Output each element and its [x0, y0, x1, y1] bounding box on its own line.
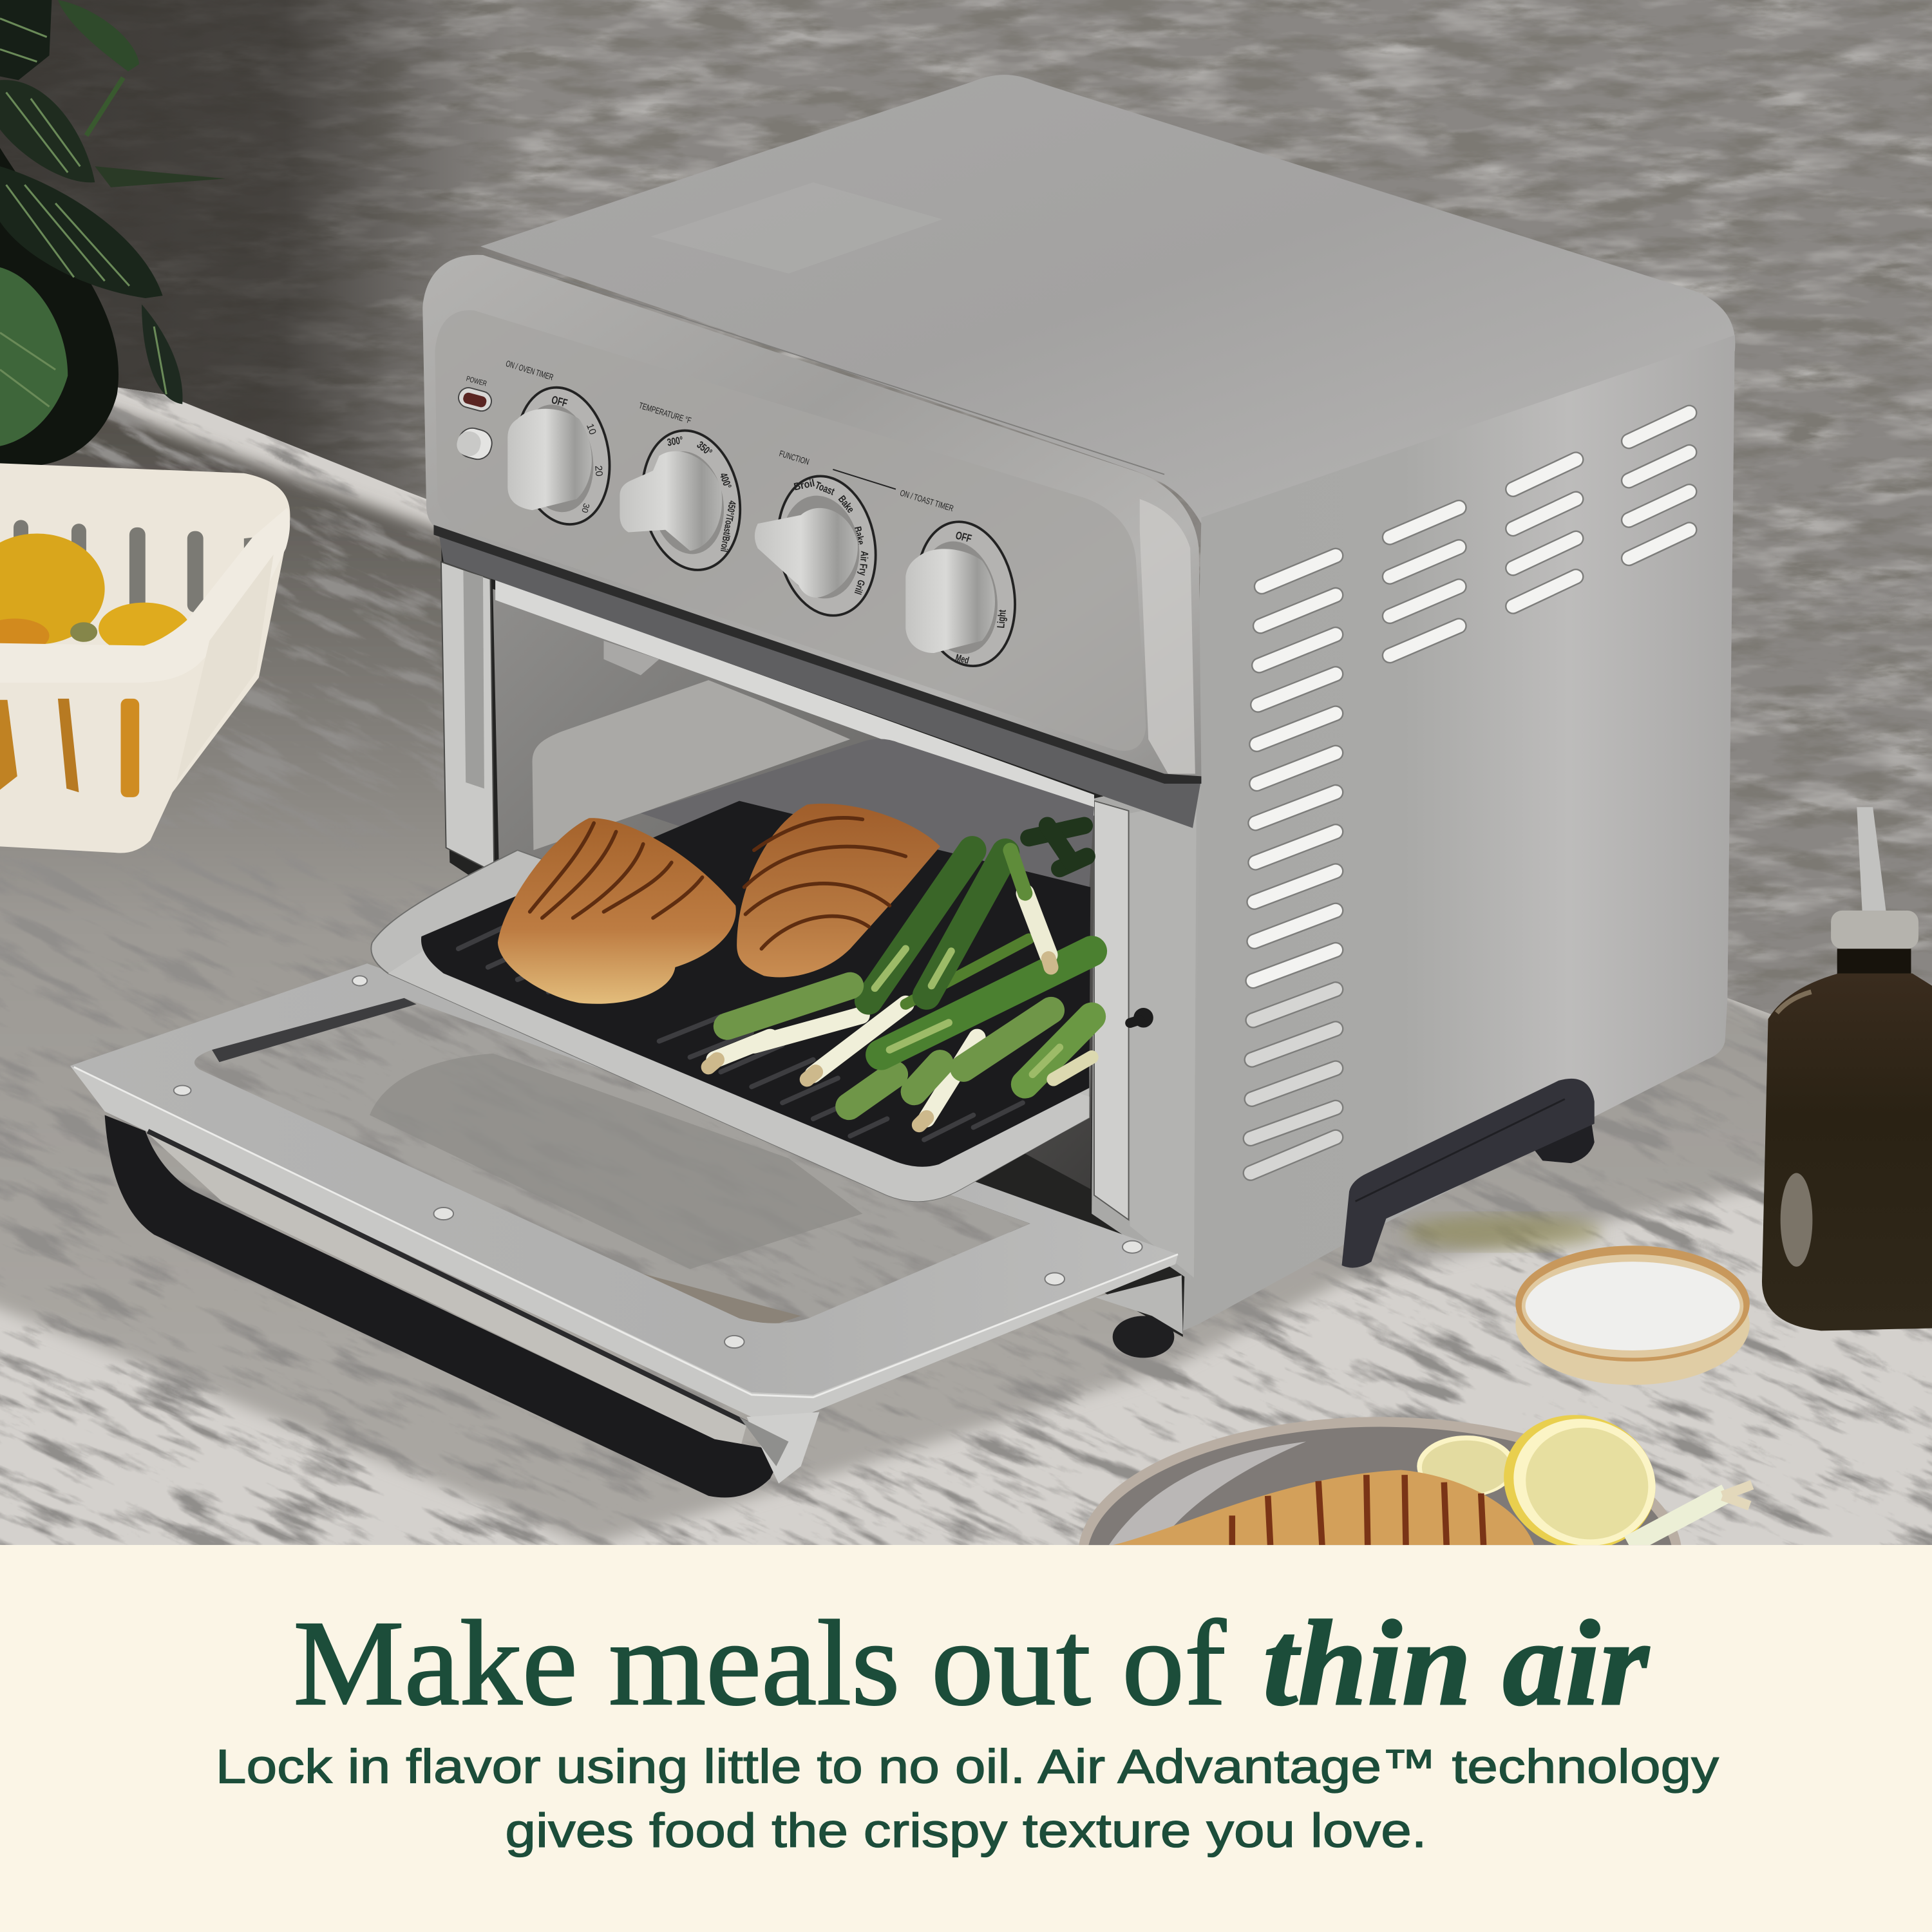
fruit basket: [0, 463, 290, 853]
headline emphasis: thin air: [1263, 1595, 1650, 1730]
countertop: [0, 357, 1932, 1553]
glass reflecting the counter: [185, 986, 1047, 1343]
knob: toast timer: Med: [954, 652, 970, 667]
oven top: [480, 75, 1735, 524]
door: [70, 963, 1183, 1497]
knob: function: Broil: [793, 477, 816, 493]
oven: [70, 75, 1735, 1497]
body line 1: Lock in flavor using little to no oil. Air Advantage™ technology: [216, 1739, 1719, 1793]
lemons: [0, 533, 105, 645]
asparagus and scallions: [708, 826, 1092, 1125]
door handle: [105, 1115, 784, 1497]
grill ribs: [459, 918, 1023, 1140]
grey seal strip: [439, 533, 1201, 828]
grill plate: [421, 801, 1090, 1167]
chicken left: [498, 818, 736, 1004]
power indicator: POWER: [465, 375, 488, 388]
door frame bands: [70, 963, 1178, 1417]
knob: temperature: 450°/Toast/Broil: [718, 500, 737, 553]
light button: [454, 425, 495, 462]
knob: oven timer: 10: [584, 422, 598, 436]
wall: [0, 0, 1932, 1084]
side vents: [1251, 413, 1689, 1173]
knob: function: Air Fry: [857, 551, 870, 576]
caption panel: [0, 1545, 1932, 1932]
front control panel: [422, 255, 1201, 779]
knob: toast timer: ON / TOAST TIMER: [899, 488, 955, 513]
knob: function: Grill: [852, 578, 867, 596]
knob: toast timer: [899, 488, 1026, 674]
door screws: [174, 976, 1142, 1348]
knob: oven timer: 20: [592, 465, 605, 477]
oil light on counter: [1405, 1215, 1602, 1249]
basket rim: [0, 507, 290, 683]
knob: temperature: 350°: [694, 439, 714, 459]
knob: function: Bake: [836, 493, 857, 515]
power indicator: [457, 375, 493, 413]
counter shadow area: [0, 401, 1771, 1545]
knob: temperature: 400°: [717, 471, 734, 490]
knob: function: Bake: [851, 526, 867, 546]
knob: temperature: TEMPERATURE °F: [638, 401, 692, 426]
inner light strip: [495, 579, 1094, 816]
basket front slots: [0, 699, 139, 797]
oil bottle: [1762, 807, 1932, 1331]
oven interior: [441, 542, 1201, 1337]
door hinge and foot: [1113, 1316, 1174, 1358]
knob: oven timer: ON / OVEN TIMER: [505, 359, 554, 383]
basket back slots: [14, 520, 255, 614]
right door frame: [1092, 774, 1201, 1282]
scallion roots: [708, 959, 1051, 1125]
knob: oven timer: OFF: [550, 393, 569, 410]
marble seen between door and handle: [148, 1133, 746, 1452]
knob: function: Toast: [813, 480, 837, 498]
left door frame: [441, 562, 494, 873]
oven top panels: [650, 182, 943, 274]
plant: [0, 0, 225, 466]
knob: oven timer: [505, 359, 620, 532]
knob: temperature: 300°: [667, 434, 684, 449]
body line 2: gives food the crispy texture you love.: [505, 1803, 1427, 1857]
salt bowl: [1515, 1245, 1750, 1385]
plate with chicken and lemon: [1078, 1398, 1752, 1693]
rack and baking pan: [371, 739, 1094, 1201]
thin black line under the door: [148, 1131, 746, 1423]
rear foot handle: [1342, 1079, 1595, 1268]
knob: temperature: [620, 401, 751, 578]
knob: toast timer: Light: [995, 609, 1009, 629]
knob: function: [755, 448, 896, 623]
tray: [371, 850, 1090, 1201]
chicken right: [737, 804, 940, 978]
knob: function: FUNCTION: [778, 448, 810, 467]
oven right side: [1183, 335, 1735, 1331]
headline: Make meals out of: [293, 1595, 1227, 1730]
knob: oven timer: 30: [580, 502, 591, 514]
knob: toast timer: OFF: [954, 529, 973, 545]
